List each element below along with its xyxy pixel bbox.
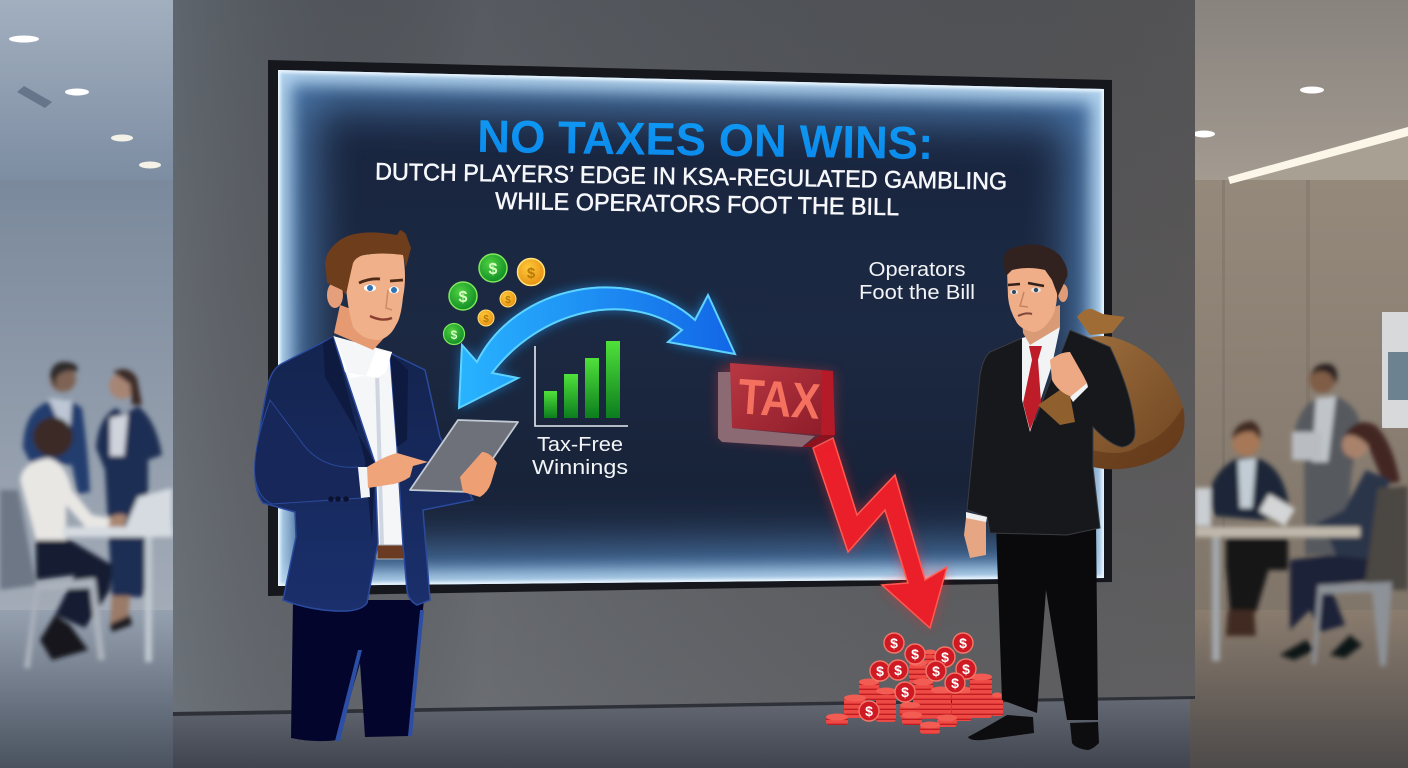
- red coin pile: $: [959, 635, 967, 651]
- operator hair: [1003, 244, 1068, 296]
- title: NO TAXES ON WINS:: [477, 110, 934, 169]
- background people: right meeting group: [1195, 364, 1408, 666]
- label: operators foot the bill: Foot the Bill: [859, 282, 975, 304]
- bar chart: tax-free growth: [535, 341, 628, 426]
- background people: left meeting group: [0, 362, 173, 668]
- label: operators foot the bill: Operators: [868, 259, 966, 281]
- player cuff: [358, 467, 370, 498]
- player jacket left: [255, 337, 378, 611]
- label: tax-free winnings: Winnings: [532, 457, 628, 479]
- player neck: [334, 305, 396, 350]
- operator hand: [1050, 352, 1087, 397]
- operator tie: [1023, 346, 1042, 430]
- person: confident player with tablet: [255, 230, 518, 741]
- red coin pile: $: [894, 662, 902, 678]
- player collar: [334, 334, 392, 378]
- tablet: [410, 420, 518, 492]
- coins: green and gold: $: [483, 314, 489, 325]
- red coin pile: $: [911, 646, 919, 662]
- red coin pile: $: [890, 635, 898, 651]
- feature wall: [173, 0, 1195, 716]
- operator shirt: [1022, 327, 1060, 432]
- title: DUTCH PLAYERS’ EDGE IN KSA-REGULATED GAMBLING: [375, 159, 1007, 195]
- operator shoes: [968, 715, 1034, 740]
- red coin pile: $: [932, 663, 940, 679]
- coins: green and gold: $: [489, 261, 498, 278]
- red falling arrow: [813, 438, 947, 628]
- red coin pile: $: [876, 663, 884, 679]
- coins: green and gold: $: [527, 265, 536, 282]
- operator jacket: [967, 330, 1135, 535]
- player trousers: [291, 600, 424, 741]
- tax box: [718, 363, 835, 447]
- red coin pile: $: [962, 661, 970, 677]
- red coin pile: [826, 633, 1003, 734]
- red coin pile: $: [941, 649, 949, 665]
- coins: green and gold: $: [505, 295, 511, 306]
- player hand holding: [460, 452, 497, 497]
- operator head: [1007, 261, 1057, 332]
- player hand pointing: [367, 453, 428, 488]
- red coin pile: $: [865, 703, 873, 719]
- player face: [359, 279, 403, 320]
- curved double arrow: [459, 287, 735, 408]
- player jacket right: [390, 353, 473, 605]
- player hair: [325, 230, 411, 295]
- centre floor: [173, 696, 1190, 768]
- label: operators foot the bill: [859, 259, 975, 304]
- operator cuff: [966, 512, 987, 523]
- player sleeve: [255, 400, 362, 504]
- title: WHILE OPERATORS FOOT THE BILL: [495, 188, 899, 221]
- player belt: [377, 545, 404, 559]
- person: worried operator with money bag: [964, 244, 1185, 750]
- player shirt: [333, 336, 404, 548]
- red coin pile: $: [951, 675, 959, 691]
- operator legs: [996, 520, 1098, 720]
- red coin pile: $: [901, 684, 909, 700]
- label: tax-free winnings: Tax-Free: [537, 434, 623, 456]
- tax box: TAX: [736, 368, 822, 430]
- title: [375, 110, 1007, 221]
- player head: [345, 253, 405, 340]
- coins: green and gold: [444, 254, 544, 344]
- operator neck: [1022, 305, 1060, 345]
- operator face: [1008, 283, 1044, 316]
- coins: green and gold: $: [451, 328, 458, 342]
- coins: green and gold: $: [459, 289, 468, 306]
- display screen: [268, 60, 1112, 596]
- money bag: [1063, 336, 1185, 469]
- label: tax-free winnings: [532, 434, 628, 479]
- bag tail: [1038, 385, 1075, 425]
- operator lower hand: [964, 518, 986, 558]
